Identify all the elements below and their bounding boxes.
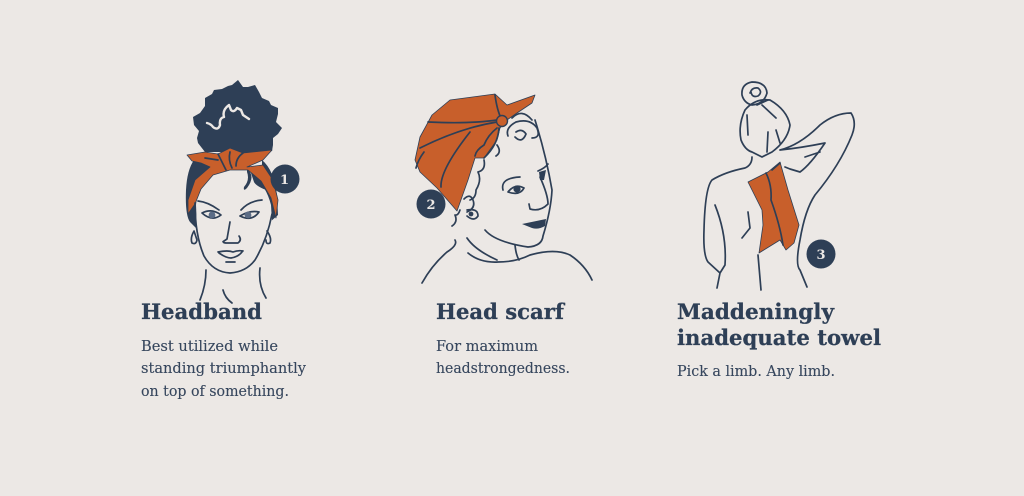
nose bbox=[529, 177, 548, 210]
right eye bbox=[240, 212, 259, 218]
mouth bbox=[218, 251, 243, 262]
knot lines bbox=[205, 152, 243, 170]
badge 2 bbox=[416, 190, 446, 218]
eyes and brows bbox=[503, 164, 548, 193]
face fill bbox=[196, 170, 272, 273]
badge 1: 1 bbox=[280, 173, 289, 188]
figure: headband bbox=[186, 80, 282, 303]
hair highlight bbox=[207, 105, 249, 129]
text: towel description: Pick a limb. Any limb. bbox=[677, 362, 835, 380]
left eye bbox=[202, 211, 221, 218]
scarf bow bbox=[475, 128, 499, 158]
mouth bbox=[522, 219, 546, 229]
text: head scarf description: headstrongedness. bbox=[436, 359, 570, 377]
text: head scarf description bbox=[436, 337, 570, 377]
headband fabric bbox=[187, 148, 278, 218]
badge 1 bbox=[270, 164, 300, 194]
badge 2: 2 bbox=[426, 198, 436, 213]
hair behind head bbox=[186, 160, 278, 228]
figure: towel bbox=[704, 82, 854, 290]
towel bbox=[748, 162, 799, 253]
neck bbox=[200, 268, 266, 303]
text: headband description bbox=[141, 337, 307, 400]
bun bbox=[742, 82, 768, 105]
badge 3 bbox=[806, 240, 836, 268]
bang curl bbox=[244, 169, 266, 190]
hair puff bbox=[193, 80, 282, 154]
knot bbox=[496, 116, 508, 126]
earring bbox=[469, 212, 473, 216]
torso left bbox=[704, 157, 761, 290]
figure: head scarf bbox=[415, 94, 592, 283]
heading: Maddeningly inadequate towel: inadequate towel bbox=[677, 325, 881, 350]
heading: Headband: Headband bbox=[141, 299, 262, 324]
nose bbox=[223, 222, 240, 243]
towel fold bbox=[766, 163, 783, 245]
text: headband description: on top of something. bbox=[141, 382, 289, 400]
scarf fold lines bbox=[416, 95, 501, 187]
ear bbox=[452, 196, 474, 226]
hair curls bbox=[470, 113, 538, 200]
earrings bbox=[191, 231, 271, 244]
badge 3: 3 bbox=[816, 248, 826, 263]
text: head scarf description: For maximum bbox=[436, 337, 538, 355]
head bbox=[740, 100, 790, 157]
heading: Maddeningly inadequate towel: Maddeningly bbox=[677, 299, 835, 324]
face outline bbox=[195, 203, 272, 273]
heading: Maddeningly inadequate towel bbox=[677, 299, 881, 350]
text: headband description: standing triumphantly bbox=[141, 359, 307, 377]
heading: Head scarf: Head scarf bbox=[436, 299, 566, 324]
scarf fabric bbox=[415, 94, 535, 211]
face outline bbox=[485, 120, 552, 247]
arm bbox=[780, 113, 854, 287]
neck and shoulders bbox=[422, 238, 592, 283]
text: headband description: Best utilized while bbox=[141, 337, 278, 355]
brows bbox=[198, 200, 262, 210]
